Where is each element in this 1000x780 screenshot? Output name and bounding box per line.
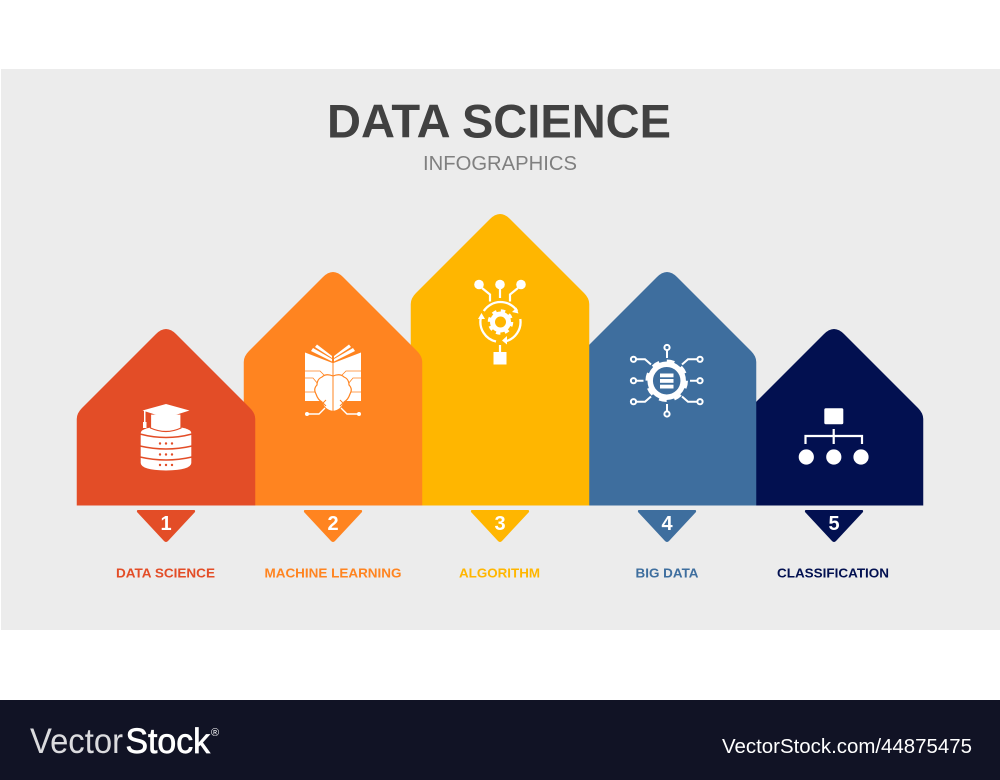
- badge 5: 5: [828, 513, 840, 535]
- badge 3: [471, 510, 529, 542]
- footer logo: Stock: [126, 722, 210, 761]
- footer url: VectorStock.com/44875475: [722, 736, 972, 758]
- title: DATA SCIENCE: [327, 94, 671, 148]
- label: classification: CLASSIFICATION: [777, 566, 889, 580]
- badge 4: [638, 510, 696, 542]
- badge 1: [137, 510, 195, 542]
- subtitle: INFOGRAPHICS: [423, 152, 577, 175]
- panel: house 5 classification: [745, 329, 923, 506]
- panel: house 3 algorithm: [411, 214, 589, 506]
- label: big data: BIG DATA: [636, 566, 699, 580]
- label: algorithm: ALGORITHM: [459, 566, 540, 580]
- badge 3: 3: [494, 513, 506, 535]
- panel: house 4 big data: [578, 272, 756, 506]
- badge 1: 1: [160, 513, 172, 535]
- badge 2: 2: [327, 513, 339, 535]
- badge 2: [304, 510, 362, 542]
- icon: algorithm gear with nodes: [474, 280, 526, 364]
- icon: big data gear: [631, 345, 703, 417]
- footer logo: [30, 722, 219, 761]
- label: machine learning: MACHINE LEARNING: [264, 566, 402, 580]
- footer logo: ®: [211, 727, 219, 739]
- footer band: [0, 700, 1000, 780]
- panel: house 1 data science: [77, 329, 255, 506]
- label: data science: DATA SCIENCE: [116, 566, 215, 580]
- badge 5: [805, 510, 863, 542]
- icon: book with brain: [305, 344, 361, 416]
- footer logo: Vector: [30, 722, 123, 761]
- panel: house 2 machine learning: [244, 272, 422, 506]
- icon: classification hierarchy: [799, 408, 869, 465]
- badge 4: 4: [661, 513, 673, 535]
- icon: graduation cap on database: [140, 404, 192, 470]
- panel: grey background: [1, 69, 1000, 630]
